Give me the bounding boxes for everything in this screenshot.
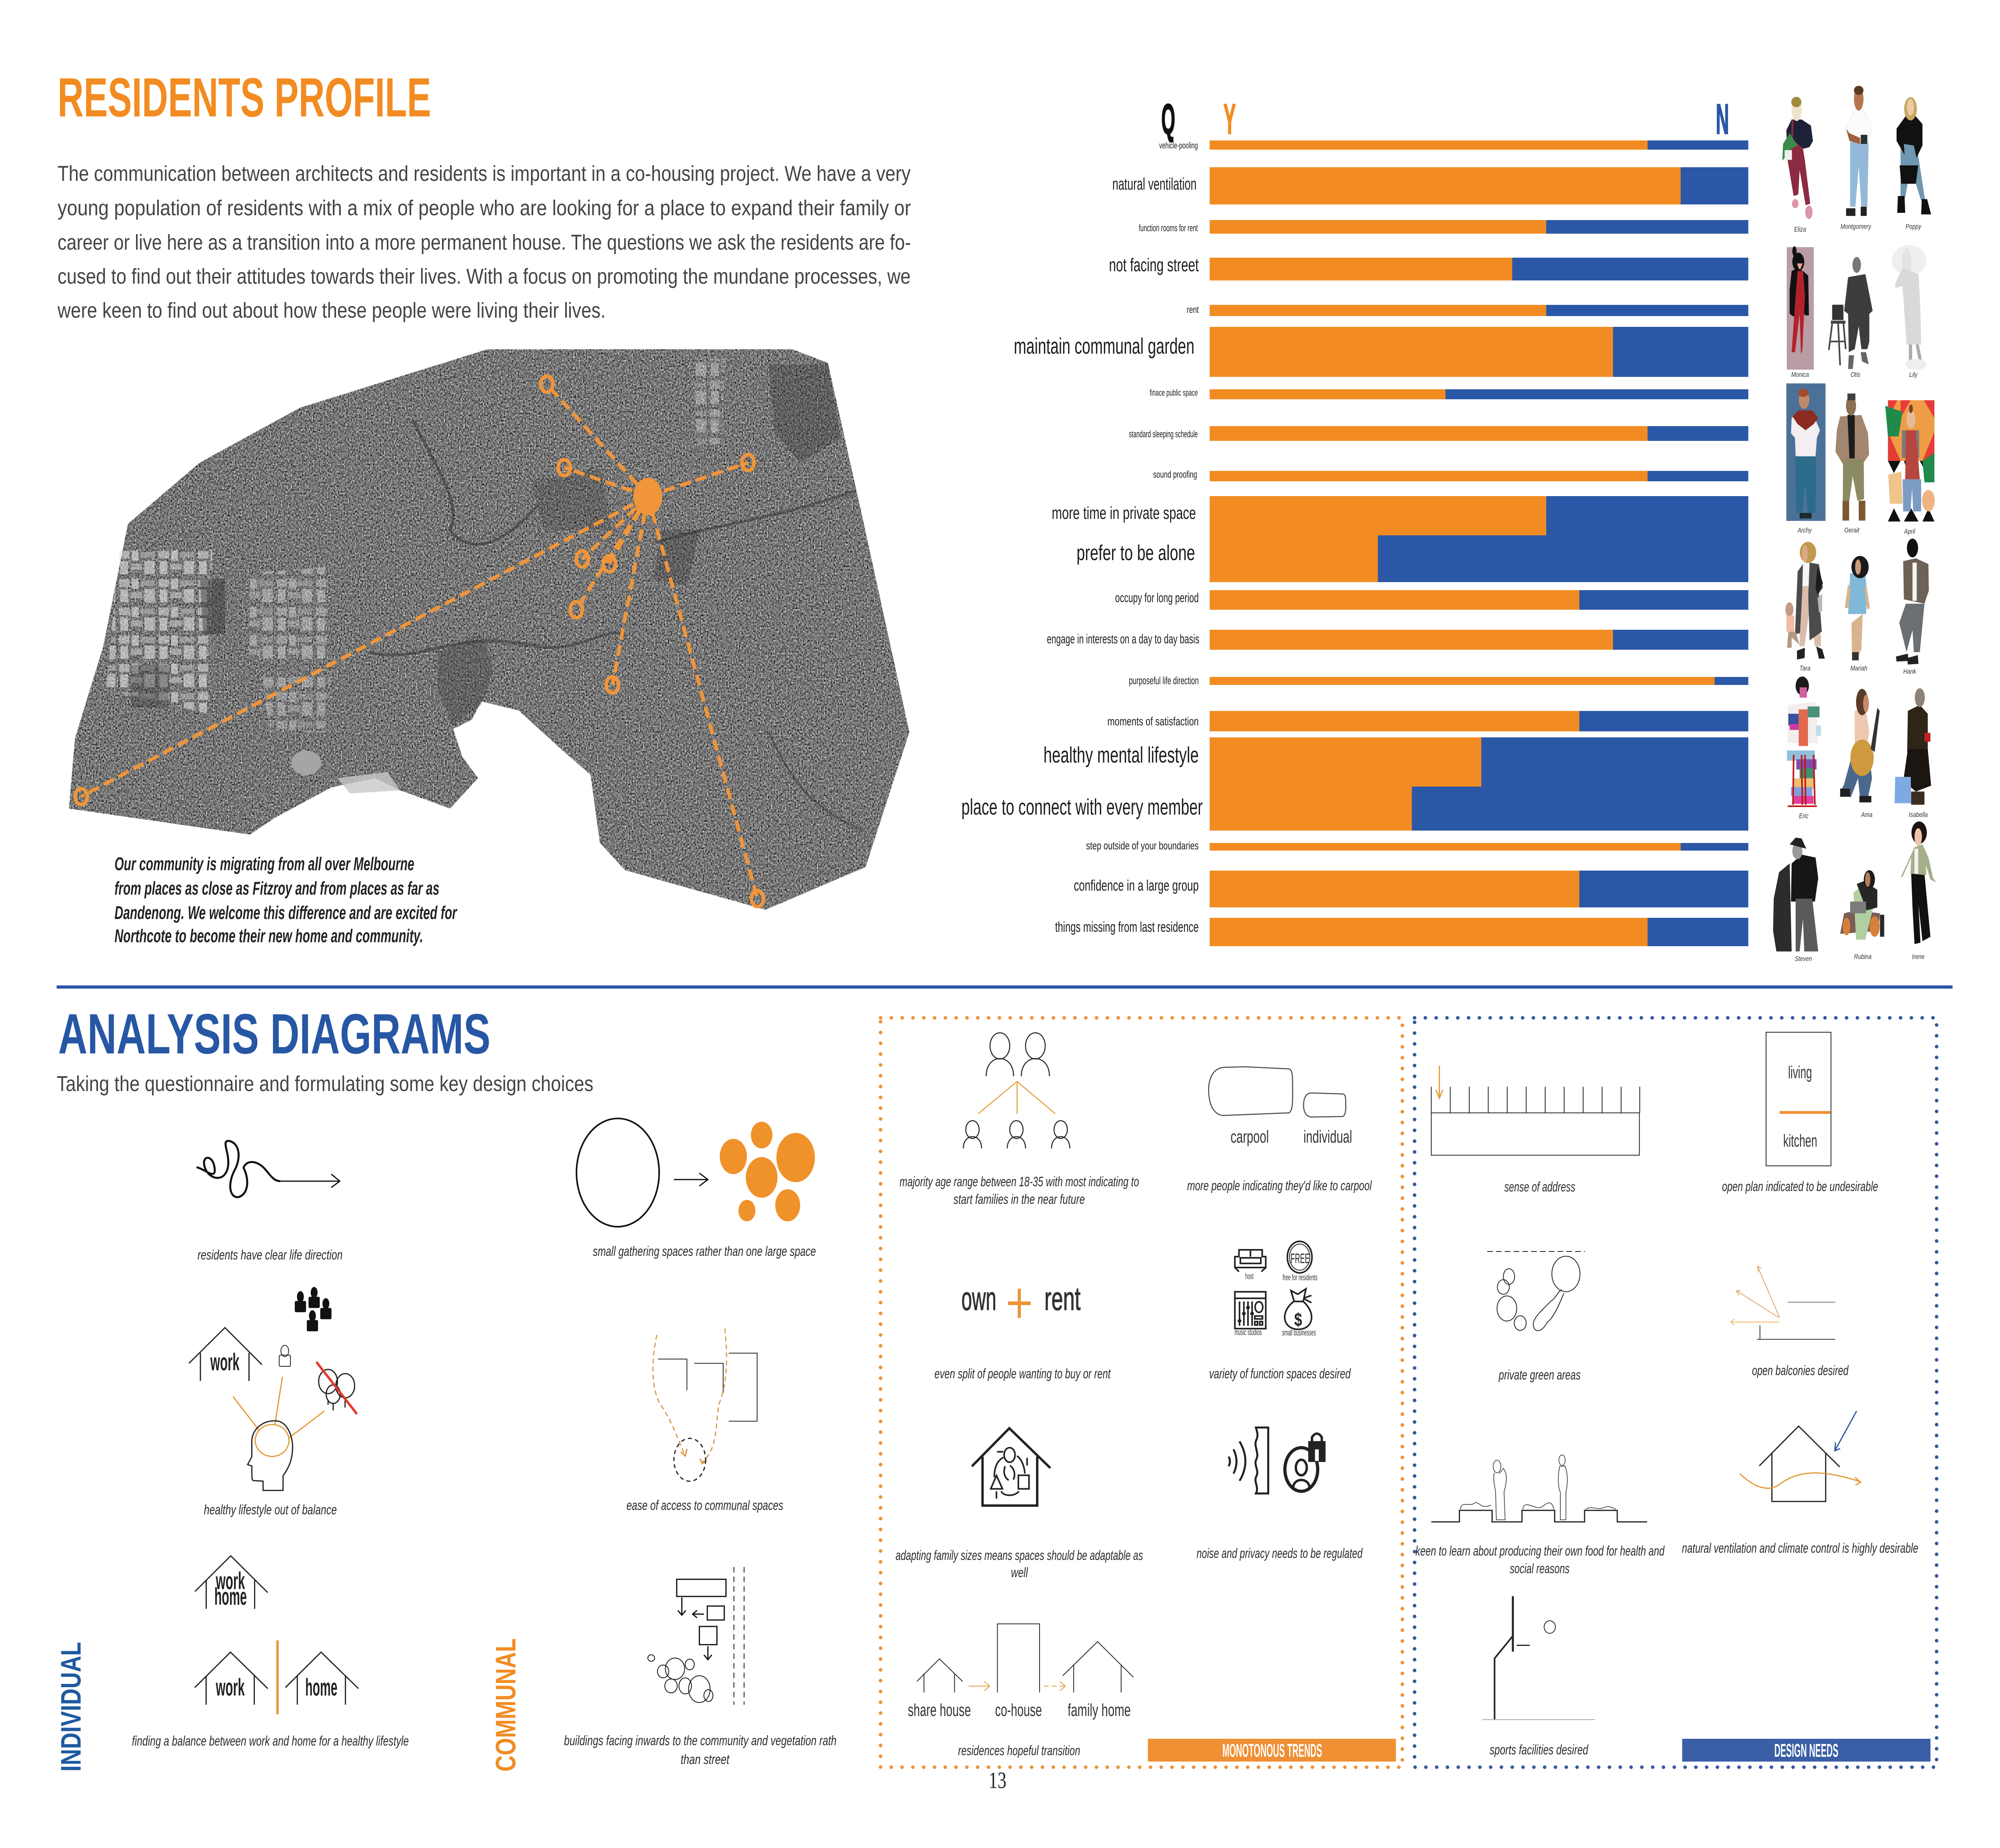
caption: social reasons — [1510, 1562, 1570, 1576]
banner: monotonous trends — [1148, 1739, 1396, 1762]
intro text block — [57, 162, 911, 322]
chart question labels: standard sleeping schedule — [1129, 429, 1198, 440]
resident names: April — [1904, 527, 1915, 535]
resident names: Poppy — [1906, 222, 1922, 230]
intro text block: The communication between architects and residents is important in a co-housing project. We have a very — [58, 162, 910, 186]
figure: Tara — [1786, 542, 1825, 659]
caption: finding a balance between work and home for a healthy lifestyle — [132, 1734, 409, 1749]
labels: function spaces: host — [1245, 1271, 1254, 1281]
caption: residents have clear life direction — [198, 1248, 343, 1263]
labels: carpool, individual — [1230, 1127, 1352, 1147]
icon: open balconies — [1731, 1266, 1835, 1339]
labels: transition stages: share house — [908, 1701, 971, 1720]
page number: 13 — [989, 1768, 1006, 1793]
chart question labels: not facing street — [1109, 254, 1199, 275]
chart question labels: vehicle-pooling — [1159, 141, 1198, 151]
chart question labels: purposeful life direction — [1129, 675, 1199, 687]
caption: than street — [681, 1752, 730, 1767]
map caption: Northcote to become their new home and community. — [114, 925, 423, 946]
chart question labels: finace public space — [1150, 388, 1198, 398]
chart question labels: maintain communal garden — [1014, 333, 1194, 358]
figure: Ama — [1840, 689, 1880, 803]
figure: Gerait — [1836, 394, 1869, 521]
resident names: Otis — [1850, 370, 1860, 378]
caption: open balconies desired — [1752, 1363, 1849, 1378]
caption: private green areas — [1498, 1368, 1580, 1383]
chart question labels: natural ventilation — [1112, 174, 1196, 193]
resident names: Lily — [1909, 370, 1918, 378]
icon: parents and children — [963, 1033, 1070, 1148]
resident names: Ama — [1861, 811, 1872, 819]
caption — [896, 1548, 1143, 1580]
caption: majority age range between 18-35 with most indicating to — [900, 1175, 1139, 1189]
map markers — [75, 376, 764, 907]
caption: well — [1011, 1566, 1028, 1580]
label: work: work — [210, 1349, 240, 1375]
figure: Monica — [1787, 246, 1814, 370]
icon: housing transition — [917, 1624, 1134, 1692]
icon: private green areas — [1487, 1251, 1585, 1331]
icon: natural ventilation house — [1740, 1411, 1861, 1502]
chart question labels: moments of satisfaction — [1108, 715, 1199, 728]
icon: garden beds with people — [1431, 1455, 1647, 1522]
caption: small gathering spaces rather than one large space — [593, 1244, 816, 1259]
figure: Otis — [1829, 257, 1873, 369]
figure: Steven — [1773, 838, 1818, 951]
caption: buildings facing inwards to the community and vegetation rath — [564, 1734, 836, 1748]
chart question labels — [962, 141, 1203, 935]
chart header: Q Y N — [1161, 96, 1729, 143]
resident names: Irene — [1912, 953, 1924, 961]
labels: function spaces: music studios — [1234, 1327, 1262, 1337]
map: Melbourne satellite image with migration lines — [69, 349, 909, 910]
figure: Eric — [1787, 677, 1821, 806]
resident names: Hank — [1903, 667, 1916, 675]
resident names: Tara — [1800, 664, 1810, 672]
resident names: Gerait — [1844, 526, 1860, 534]
caption: ease of access to communal spaces — [626, 1498, 783, 1513]
labels: work, home: work — [216, 1674, 245, 1701]
caption: variety of function spaces desired — [1209, 1367, 1351, 1381]
labels: transition stages: family home — [1068, 1701, 1131, 1720]
icon: noise and privacy — [1228, 1428, 1324, 1494]
icon: work house — [189, 1327, 262, 1381]
icon: trees crossed out — [316, 1362, 357, 1414]
chart question labels: place to connect with every member — [962, 794, 1203, 819]
caption: keen to learn about producing their own food for health and — [1416, 1544, 1665, 1559]
labels: work / home stacked — [214, 1568, 247, 1610]
caption: open plan indicated to be undesirable — [1722, 1179, 1878, 1194]
chart question labels: function rooms for rent — [1139, 223, 1198, 234]
chart question labels: occupy for long period — [1115, 591, 1199, 605]
chart question labels: engage in interests on a day to day basis — [1047, 632, 1199, 647]
resident names: Eric — [1799, 812, 1808, 820]
icon: own plus rent: own — [962, 1281, 996, 1317]
chart question labels: rent — [1187, 304, 1199, 315]
chart header: Q Y N: N — [1716, 96, 1729, 143]
caption: even split of people wanting to buy or rent — [934, 1367, 1111, 1381]
icon: one big circle to many small circles — [576, 1119, 815, 1227]
labels: function spaces — [1234, 1251, 1318, 1337]
map caption: Our community is migrating from all over Melbourne — [114, 853, 414, 874]
chart question labels: things missing from last residence — [1055, 919, 1199, 935]
icon: adaptable house — [972, 1428, 1050, 1506]
chart question labels: prefer to be alone — [1076, 541, 1195, 565]
icon: head — [248, 1421, 293, 1490]
labels: work / home stacked: home — [214, 1584, 247, 1610]
chart question labels: sound proofing — [1153, 469, 1197, 480]
chart question labels: healthy mental lifestyle — [1044, 742, 1199, 767]
figure: Mariah — [1845, 556, 1870, 661]
icon: sense of address — [1431, 1066, 1640, 1155]
panel: monotonous trends — [880, 1018, 1402, 1767]
labels: transition stages: co-house — [995, 1701, 1042, 1720]
figure: April — [1885, 400, 1935, 521]
labels: work, home: home — [305, 1674, 338, 1701]
resident names: Rubina — [1854, 953, 1872, 961]
icon: group of people — [295, 1287, 332, 1331]
figure: Eliza — [1782, 97, 1813, 219]
vertical label: individual: INDIVIDUAL — [56, 1642, 87, 1772]
caption — [1416, 1544, 1665, 1576]
labels: function spaces: $ — [1294, 1309, 1302, 1330]
caption: start families in the near future — [954, 1192, 1085, 1207]
icons: function spaces — [1235, 1241, 1312, 1329]
intro text block: career or live here as a transition into a more permanent house. The questions we ask the residents are fo- — [58, 230, 911, 254]
resident names: Montgomery — [1840, 222, 1872, 230]
figure: Archy — [1786, 383, 1826, 521]
caption: noise and privacy needs to be regulated — [1196, 1546, 1363, 1561]
caption: healthy lifestyle out of balance — [204, 1503, 337, 1518]
chart header: Q Y N: Q — [1161, 96, 1175, 143]
diagram: ease of access — [653, 1329, 757, 1481]
resident names: Mariah — [1850, 664, 1867, 672]
figure: Montgomery — [1846, 86, 1873, 216]
labels: function spaces: FREE — [1290, 1251, 1310, 1266]
resident portraits: rows 4-6 — [1773, 539, 1936, 951]
caption: natural ventilation and climate control is highly desirable — [1682, 1541, 1918, 1556]
panel: design needs — [1414, 1018, 1937, 1767]
caption: more people indicating they'd like to carpool — [1187, 1179, 1372, 1193]
figure: Poppy — [1896, 97, 1931, 214]
diagram: healthy lifestyle out of balance — [189, 1287, 357, 1609]
icon: squiggle arrow — [196, 1141, 340, 1197]
icon: single person — [279, 1345, 290, 1366]
resident names: Isabella — [1909, 811, 1928, 819]
figure: Isabella — [1894, 688, 1931, 805]
resident portraits: rows 1-3 — [1782, 86, 1935, 521]
figure: Hank — [1896, 539, 1929, 665]
icon: work home house — [195, 1556, 268, 1609]
map caption: Dandenong. We welcome this difference and are excited for — [114, 902, 458, 923]
icon: living and kitchen plan — [1766, 1032, 1831, 1166]
caption — [900, 1175, 1139, 1207]
resident names: Monica — [1791, 370, 1809, 378]
title: residents profile: RESIDENTS PROFILE — [58, 67, 431, 128]
map caption — [114, 853, 458, 946]
resident names: Archy — [1797, 526, 1812, 534]
banner: design needs — [1682, 1739, 1930, 1762]
labels: work, home — [216, 1674, 338, 1701]
resident names: Steven — [1795, 955, 1812, 963]
resident names: Eliza — [1794, 225, 1806, 233]
caption: residences hopeful transition — [958, 1744, 1080, 1758]
figure: Lily — [1892, 245, 1926, 370]
stacked bar chart: yes / no answers — [1210, 140, 1748, 946]
vertical label: communal: COMMUNAL — [490, 1638, 522, 1772]
banner: monotonous trends: MONOTONOUS TRENDS — [1222, 1740, 1322, 1761]
labels: work / home stacked: work — [216, 1568, 245, 1594]
labels: carpool, individual: carpool — [1230, 1127, 1269, 1147]
labels: transition stages — [908, 1701, 1131, 1720]
chart question labels: step outside of your boundaries — [1086, 839, 1199, 852]
connectors — [233, 1377, 324, 1438]
icon: cars — [1209, 1067, 1346, 1117]
migration lines — [81, 384, 758, 899]
diagram: buildings facing inwards — [648, 1567, 744, 1705]
chart question labels: confidence in a large group — [1074, 877, 1199, 894]
figure: Irene — [1900, 821, 1936, 944]
caption: sports facilities desired — [1490, 1743, 1588, 1758]
chart header: Q Y N: Y — [1224, 96, 1236, 143]
icon: basketball hoop — [1482, 1596, 1595, 1720]
caption: sense of address — [1504, 1180, 1575, 1195]
title: analysis diagrams: ANALYSIS DIAGRAMS — [58, 1002, 490, 1065]
caption: adapting family sizes means spaces should be adaptable as — [896, 1548, 1143, 1563]
icon: living and kitchen plan: kitchen — [1783, 1131, 1817, 1151]
icon: living and kitchen plan: living — [1788, 1063, 1812, 1082]
labels: function spaces: small businesses — [1282, 1328, 1316, 1337]
caption — [564, 1734, 836, 1767]
intro text block: cused to find out their attitudes towards their lives. With a focus on promoting the mundane processes, we — [58, 264, 910, 288]
intro text block: were keen to find out about how these people were living their lives. — [57, 298, 606, 322]
diagram: work and home separated — [195, 1640, 358, 1714]
map caption: from places as close as Fitzroy and from places as far as — [114, 878, 439, 899]
chart question labels: more time in private space — [1052, 504, 1196, 523]
intro text block: young population of residents with a mix of people who are looking for a place to expand their family or — [58, 196, 911, 220]
banner: design needs: DESIGN NEEDS — [1774, 1740, 1838, 1761]
resident names — [1791, 222, 1928, 963]
icon: own plus rent — [962, 1281, 1080, 1318]
icon: own plus rent: rent — [1044, 1281, 1080, 1317]
subtitle: Taking the questionnaire and formulating some key design choices — [57, 1072, 593, 1096]
figure: Rubina — [1840, 870, 1884, 940]
labels: carpool, individual: individual — [1304, 1127, 1352, 1147]
labels: function spaces: free for residents — [1283, 1273, 1318, 1282]
